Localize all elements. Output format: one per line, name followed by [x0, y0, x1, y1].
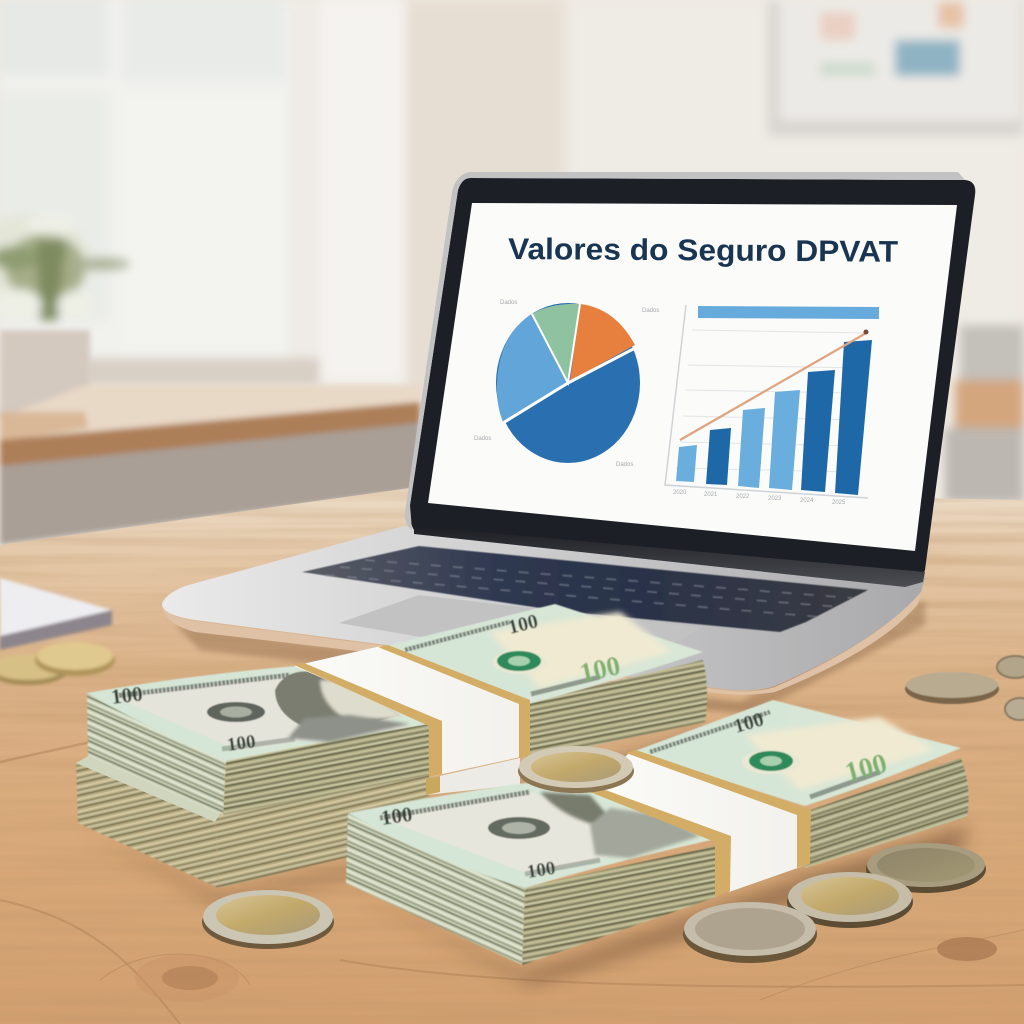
- banknote top left: 100: [110, 681, 144, 709]
- laptop lid: [410, 178, 975, 585]
- laptop front edge: [162, 592, 921, 695]
- banknote top right: [632, 700, 961, 806]
- coin on top of stacks: [518, 746, 634, 793]
- keyboard keys: [325, 560, 852, 617]
- laptop base shadow: [175, 600, 925, 715]
- closed notebook on left of desk: [0, 578, 112, 650]
- banknote top left: 100: [226, 731, 257, 756]
- upper bundle right side: [526, 660, 707, 760]
- wood grain: [0, 488, 1024, 940]
- axis labels: 2021: [704, 492, 718, 498]
- laptop: [162, 172, 975, 715]
- banknote top right: 100: [506, 610, 540, 639]
- coins on desk, right: [683, 843, 986, 963]
- banknote top right: [385, 604, 703, 704]
- banknote top right: 100: [577, 650, 623, 688]
- portrait: [540, 792, 625, 835]
- left side: [346, 813, 525, 965]
- pie labels: Dados: [642, 308, 659, 314]
- pie labels: Dados: [500, 300, 517, 306]
- laptop lid edge: [405, 172, 965, 530]
- wall poster with chart: [768, 0, 1024, 136]
- paper band: [294, 645, 530, 777]
- keyboard: [302, 546, 868, 632]
- lower bundle band: [426, 758, 520, 795]
- cash stack: right: [346, 700, 970, 985]
- window sill: [0, 385, 420, 545]
- front side: [522, 846, 716, 965]
- laptop screen: [428, 203, 957, 551]
- lower bundle: [76, 755, 430, 888]
- axis labels: 2025: [832, 500, 846, 506]
- banknote top right: 100: [731, 708, 766, 738]
- screen title: Valores do Seguro DPVAT: [508, 233, 898, 269]
- right side: [805, 758, 969, 868]
- cash stack: left: [76, 604, 710, 905]
- icon: potted plant: [0, 214, 130, 418]
- seal: [488, 817, 550, 839]
- seal: [207, 702, 265, 722]
- coin on desk, left: [202, 890, 334, 949]
- pie labels: [474, 300, 659, 468]
- axis labels: 2024: [800, 498, 814, 504]
- background wall: [411, 4, 559, 394]
- lower band gold strip: [426, 776, 440, 795]
- axis labels: 2023: [768, 496, 782, 502]
- banknote top left: [348, 783, 720, 888]
- banknote top left: 100: [379, 802, 414, 830]
- laptop base: [162, 526, 925, 691]
- upper bundle front side: [223, 723, 429, 815]
- portrait: [275, 671, 400, 730]
- upper bundle left side: [87, 693, 226, 815]
- axis labels: 2022: [736, 494, 750, 500]
- paper band: [590, 750, 811, 897]
- right background shelf: [945, 325, 1024, 503]
- banknote top right: 100: [842, 748, 890, 789]
- window with plant: [0, 0, 405, 390]
- trackpad: [339, 595, 700, 672]
- wood knots: [135, 937, 997, 1002]
- pie labels: Dados: [616, 462, 633, 468]
- pie chart: [474, 300, 659, 468]
- coins on right side of desk: [905, 656, 1024, 720]
- pie labels: Dados: [474, 436, 491, 442]
- wooden desk: [0, 488, 1024, 1024]
- blurred coins on left: [0, 642, 115, 685]
- axis labels: 2020: [673, 490, 687, 496]
- axis labels: [673, 490, 846, 506]
- banknote top left: [87, 666, 430, 761]
- bar chart: [665, 305, 879, 506]
- banknote top left: 100: [525, 858, 557, 883]
